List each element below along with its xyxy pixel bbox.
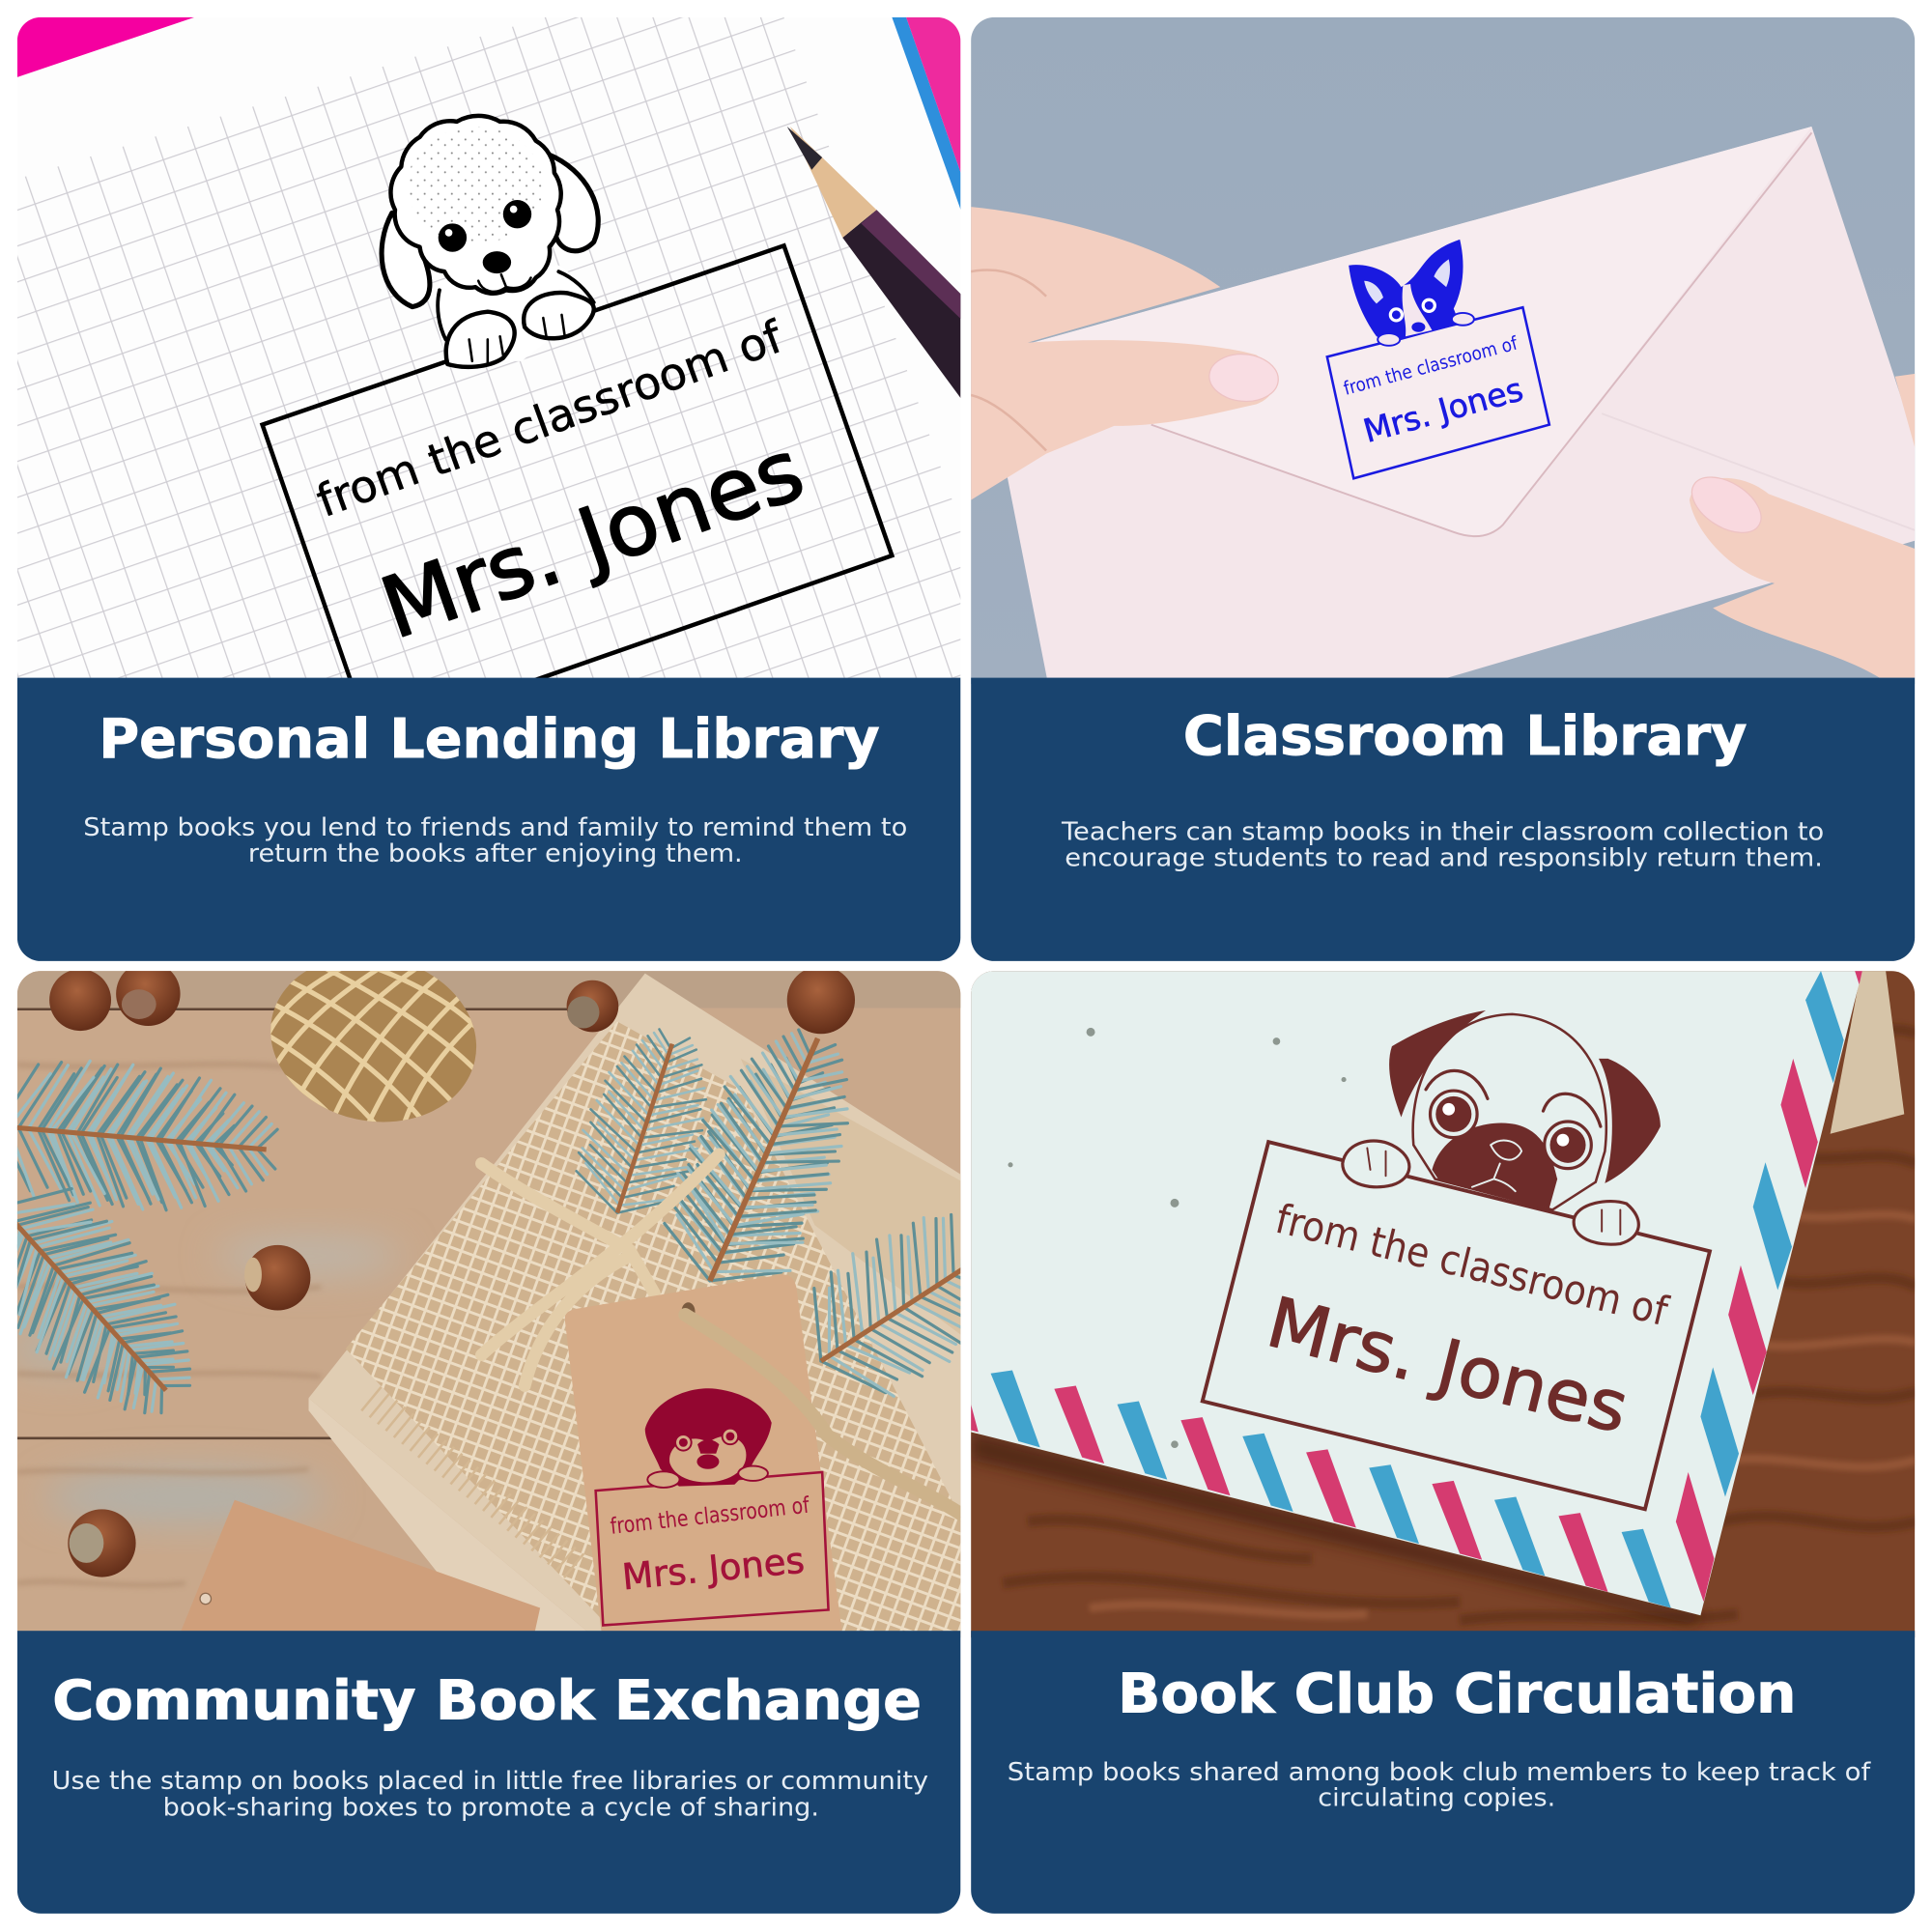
- airmail stripes: [971, 971, 1862, 1608]
- text block: community exchange description: Use the stamp on books placed in little free libraries or community: [52, 1767, 928, 1796]
- stamp frame: [1203, 1142, 1710, 1509]
- heading: Community Book Exchange: Community Book Exchange: [52, 1670, 922, 1733]
- panel: book club circulation: [971, 971, 1917, 1921]
- text block: community exchange description: [52, 1767, 928, 1822]
- stamp text: Mrs. Jones: Mrs. Jones: [1260, 1282, 1635, 1449]
- icon: left hand: [971, 207, 1280, 500]
- twine knot: [481, 1154, 719, 1386]
- stamp text: Mrs. Jones: Mrs. Jones: [370, 421, 815, 658]
- text block: community exchange description: book-sharing boxes to promote a cycle of sharing.: [163, 1793, 819, 1822]
- stamp text: Mrs. Jones: Mrs. Jones: [1359, 370, 1527, 450]
- panel: personal lending library: [17, 17, 963, 968]
- text block: book club description: [1008, 1758, 1871, 1813]
- panel: community book exchange: [17, 971, 960, 1914]
- text block: personal lending description: Stamp books you lend to friends and family to remind them to: [83, 813, 907, 842]
- icon: rottweiler: [645, 1388, 772, 1488]
- photo: airmail paper on wood with maroon stamp: [971, 971, 1917, 1637]
- photo: grid paper with black stamp: [17, 17, 963, 738]
- stamp frame: [596, 1472, 829, 1625]
- text block: personal lending description: [83, 813, 907, 868]
- icon: pine branches: [0, 1008, 1057, 1448]
- stamp frame: [259, 243, 895, 678]
- stamp text: from the classroom of: from the classroom of: [1271, 1195, 1673, 1335]
- icon: poodle: [382, 116, 598, 367]
- text block: classroom library description: Teachers can stamp books in their classroom collection to: [1061, 818, 1824, 847]
- text block: personal lending description: return the books after enjoying them.: [248, 839, 743, 868]
- icon: twine ball: [270, 971, 476, 1122]
- kraft tag with stamp: [565, 1274, 963, 1635]
- photo: gift with kraft tag and red stamp: [17, 971, 960, 1638]
- heading: Personal Lending Library: Personal Lending Library: [99, 708, 880, 771]
- stamp text: Mrs. Jones: Mrs. Jones: [620, 1540, 807, 1598]
- gift package: [309, 974, 963, 1635]
- photo: envelope held by hands with blue stamp: [971, 17, 1917, 684]
- text block: classroom library description: encourage students to read and responsibly return them.: [1065, 844, 1823, 873]
- second kraft tag: [179, 1500, 540, 1635]
- heading: Book Club Circulation: Book Club Circulation: [1118, 1663, 1796, 1726]
- heading: Classroom Library: Classroom Library: [1183, 705, 1747, 768]
- text block: classroom library description: [1061, 818, 1824, 873]
- icon: right hand: [1682, 374, 1917, 678]
- icon: hazelnuts: [49, 962, 855, 1577]
- stamp text: from the classroom of: from the classroom of: [310, 310, 790, 527]
- stamp frame: [1327, 307, 1549, 478]
- panel: classroom library: [971, 17, 1917, 968]
- text block: book club description: circulating copies.: [1318, 1784, 1555, 1813]
- icon: pug: [1343, 1010, 1661, 1244]
- text block: book club description: Stamp books shared among book club members to keep track of: [1008, 1758, 1871, 1787]
- stamp text: from the classroom of: from the classroom of: [1341, 331, 1520, 400]
- stamp text: from the classroom of: from the classroom of: [609, 1493, 811, 1540]
- icon: chihuahua: [1349, 240, 1474, 346]
- paper speckles: [1008, 1028, 1347, 1448]
- icon: pencil: [787, 127, 963, 401]
